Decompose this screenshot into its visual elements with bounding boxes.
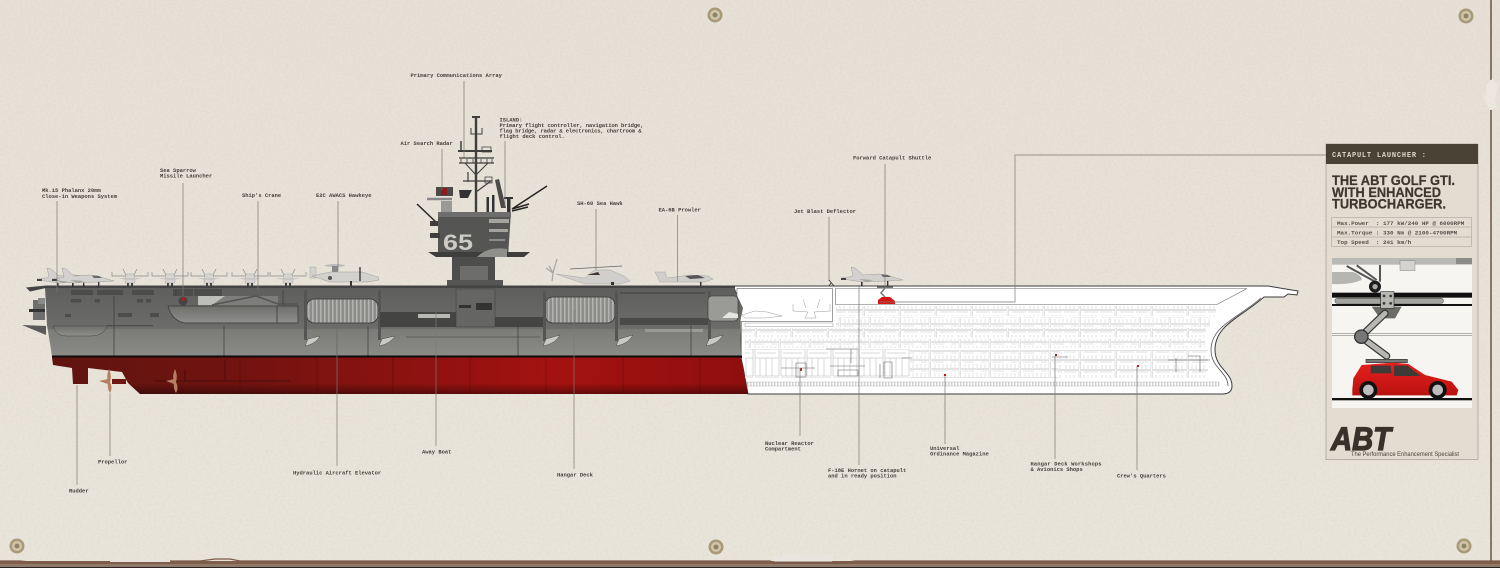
island base — [447, 257, 503, 286]
label: Sea Sparrow: Missile Launcher — [160, 172, 212, 180]
island tower — [438, 212, 511, 257]
reactor detail — [781, 349, 1210, 378]
shuttle plate — [1381, 292, 1394, 308]
label: Mk.15 Phalanx: Mk.15 Phalanx 20mm — [42, 187, 101, 194]
icon: rivet bottom left — [10, 538, 24, 554]
sea sparrow launcher — [178, 296, 188, 306]
deck-edge rooms mid ship — [380, 289, 708, 337]
label: Nuclear Reactor Compartment: Nuclear Reactor — [765, 440, 814, 447]
panel heading: TURBOCHARGER. — [1332, 196, 1446, 212]
label: Air Search Radar: Air Search Radar — [400, 140, 453, 147]
ABT logo: ABT — [1330, 421, 1393, 457]
label: Propellor: Propellor — [98, 458, 127, 466]
flight deck edge — [26, 286, 735, 292]
panel header: CATAPULT LAUNCHER : — [1332, 152, 1426, 160]
label: Primary Communications Array — [410, 72, 503, 158]
label: Mk.15 Phalanx: Close-in Weapons System — [42, 193, 118, 200]
sensor masts — [459, 179, 513, 212]
label: Universal Ordinance Magazine — [930, 376, 989, 458]
ship hull: grey side — [22, 286, 743, 356]
label: E2C AWACS Hawkeye: E2C AWACS Hawkeye — [316, 192, 371, 199]
car windows — [1371, 366, 1421, 376]
compartments deck 2 — [836, 317, 1210, 327]
label: Forward Catapult Shuttle — [853, 154, 931, 288]
catapult shuttle with red car on deck — [877, 287, 895, 304]
label: Forward Catapult Shuttle: Forward Catapult Shuttle — [853, 154, 931, 162]
label: Propellor — [98, 393, 127, 466]
ABT logo: The Performance Enhancement Specialist — [1351, 451, 1459, 458]
hangar opening with crane — [168, 290, 298, 323]
label: Hangar Deck: Hangar Deck — [557, 472, 594, 478]
rotating radar — [427, 187, 453, 212]
panel heading: WITH ENHANCED — [1332, 184, 1441, 200]
magazines and workshops — [910, 350, 1060, 378]
waterline — [52, 356, 742, 358]
panel header — [1326, 144, 1478, 164]
label: Universal Ordinance Magazine: Ordinance Magazine — [930, 450, 989, 458]
aircraft: SH-60 Sea Hawk — [546, 259, 630, 285]
gallery openings — [65, 289, 222, 326]
panel heading: THE ABT GOLF GTI. — [1332, 172, 1455, 188]
specification table: Max.Power : 177 kW/240 HP @ 6000RPM — [1337, 220, 1465, 227]
label: Hangar Deck Workshops — [1030, 356, 1102, 473]
label: Away Boat: Away Boat — [422, 448, 451, 456]
red car — [1352, 363, 1458, 395]
label: Crew's Quarters: Crew's Quarters — [1117, 472, 1166, 480]
compartments deck 3 — [742, 328, 1206, 338]
label: Hydraulic Aircraft Elevator: Hydraulic Aircraft Elevator — [293, 470, 381, 476]
label: SH-60 Sea Hawk — [577, 200, 623, 270]
label: Crew's Quarters — [1117, 366, 1166, 480]
label: E2C AWACS Hawkeye — [316, 192, 371, 271]
label: Nuclear Reactor Compartment: Compartment — [765, 446, 801, 452]
engineering spaces — [745, 349, 911, 378]
forward compartments — [1058, 350, 1208, 378]
double bottom band — [747, 382, 1219, 386]
label: Universal Ordinance Magazine: Universal — [930, 445, 960, 452]
catapult illustration with car — [1332, 258, 1472, 408]
outline aircraft in hangar — [742, 299, 830, 318]
aircraft underside — [1332, 258, 1472, 293]
launch arm — [1355, 313, 1387, 356]
hangar strip — [836, 288, 1247, 304]
flight deck aircraft: parked hornets front view — [112, 269, 306, 286]
aircraft: F-18 Hornet on catapult — [841, 267, 903, 286]
aft aircraft elevator — [306, 299, 378, 323]
label: EA-6B Prowler — [658, 206, 701, 281]
mast — [458, 117, 494, 212]
island side platforms — [428, 221, 530, 257]
label: Hangar Deck Workshops: Hangar Deck Workshops — [1030, 460, 1102, 468]
label: Hangar Deck Workshops: & Avionics Shops — [1030, 466, 1083, 473]
stern gun platform — [22, 325, 46, 335]
label: Rudder — [69, 385, 89, 494]
label: Sea Sparrow — [160, 167, 212, 296]
forward aircraft elevator — [545, 297, 615, 323]
aircraft: EA-6B Prowler — [655, 272, 713, 286]
red markers — [800, 354, 1139, 376]
catapult leader line to panel — [880, 155, 1326, 302]
catapult track — [1332, 293, 1472, 335]
label: F-18E Hornet on catapult — [828, 285, 906, 480]
island superstructure — [417, 117, 547, 286]
propeller aft — [99, 369, 126, 393]
label: Rudder: Rudder — [69, 488, 89, 494]
panel: catapult launcher — [1326, 144, 1478, 460]
island arch — [477, 248, 507, 257]
hangar bay outline — [737, 288, 832, 322]
label: Ship's Crane: Ship's Crane — [242, 192, 281, 199]
label: Island — [500, 116, 644, 206]
cutaway bow: white interior cross-section — [733, 286, 1298, 394]
icon: rivet bottom centre — [708, 540, 724, 554]
shuttle block — [1372, 307, 1402, 318]
label: Jet Blast Deflector — [794, 208, 856, 286]
bow bay with aircraft — [708, 296, 738, 321]
icon: rivet bottom right — [1456, 538, 1472, 554]
label: Mk.15 Phalanx — [42, 187, 118, 292]
label: F-18E Hornet on catapult: and in ready position — [828, 472, 897, 480]
label: F-18E Hornet on catapult: F-18E Hornet on catapult — [828, 467, 906, 474]
label: SH-60 Sea Hawk: SH-60 Sea Hawk — [577, 200, 623, 207]
label: Sea Sparrow: Sea Sparrow — [160, 167, 197, 174]
elevator doors and fins — [304, 290, 711, 341]
label: EA-6B Prowler: EA-6B Prowler — [658, 206, 701, 214]
icon: rivet top centre — [708, 8, 722, 22]
specification table — [1332, 218, 1472, 246]
hull frame lines — [114, 290, 691, 356]
hull number: 65 — [443, 230, 473, 255]
ABT logo — [1330, 421, 1459, 458]
road — [1332, 398, 1472, 400]
roof rack — [1366, 359, 1407, 363]
label: Island: Primary flight controller, navigation bridge, — [500, 122, 644, 129]
label: Island: flag bridge, radar & electronics, chartroom & — [500, 128, 642, 134]
icon: rivet top right — [1458, 8, 1474, 24]
specification table: Top Speed : 241 km/h — [1337, 239, 1412, 246]
panel heading — [1332, 172, 1455, 212]
label: Primary Communications Array: Primary Communications Array — [410, 72, 503, 79]
stern boat — [53, 326, 107, 336]
label: Air Search Radar — [400, 140, 453, 190]
specification table: Max.Torque : 330 Nm @ 2100-4700RPM — [1337, 230, 1458, 236]
island windows — [489, 219, 509, 241]
ship hull: red underside — [52, 358, 748, 394]
label: Island: ISLAND: — [500, 116, 522, 124]
compartments deck 1 — [836, 306, 1216, 316]
car wheels — [1359, 381, 1447, 399]
label: Ship's Crane — [242, 192, 281, 290]
propeller forward — [166, 369, 178, 393]
compartments deck 4 — [745, 339, 1205, 348]
close-in weapon mount — [29, 298, 45, 320]
label: Island: flight deck control. — [500, 133, 565, 140]
antennas — [417, 186, 547, 224]
label: Nuclear Reactor Compartment — [765, 368, 814, 452]
flight deck aircraft: hornets at stern — [37, 268, 114, 287]
aircraft: E2C Hawkeye — [310, 264, 379, 286]
label: Jet Blast Deflector: Jet Blast Deflector — [794, 208, 856, 215]
